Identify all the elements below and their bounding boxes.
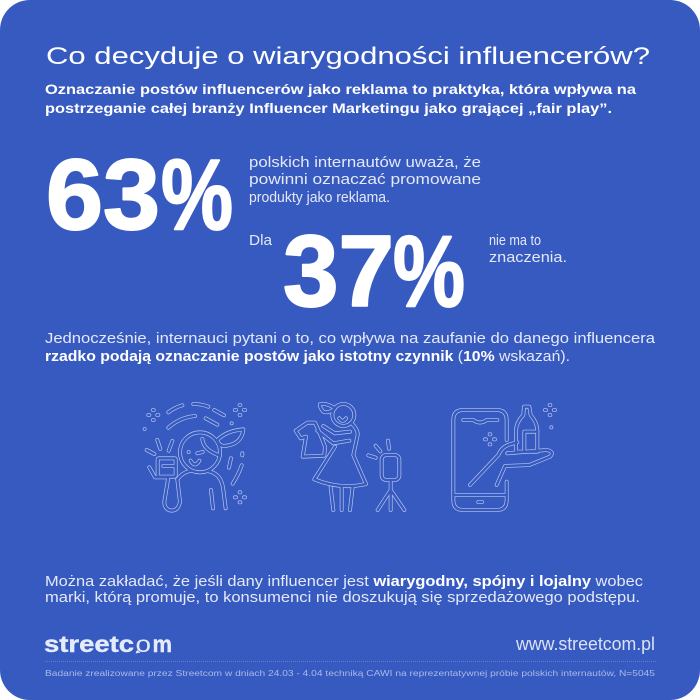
text: Dla: Dla (249, 233, 273, 249)
stat: 37%: % (393, 216, 465, 328)
text: trust factors: rzadko podają oznaczanie postów jako istotny czynnik (10% wskazań). (45, 348, 570, 365)
icon: influencer with phone (145, 404, 245, 511)
logo: streetcom: m (152, 631, 172, 657)
text: 37% description: nie ma to (489, 233, 541, 249)
text: trust factors: Jednocześnie, internauci pytani o to, co wpływa na zaufanie do danego influencera (45, 330, 656, 347)
icon: woman presenting shirt to camera (296, 404, 404, 510)
logo: streetcom: streetc (44, 631, 134, 657)
stat: 37%: 37 (283, 216, 394, 328)
text: trust factors (45, 330, 656, 365)
text: conclusion (45, 573, 644, 606)
stat: 63% (46, 139, 233, 251)
text: 63% description: polskich internautów uważa, że (249, 155, 481, 171)
text: 63% description: powinni oznaczać promowane (249, 172, 481, 188)
link: website: www.streetcom.pl (515, 634, 655, 654)
intro text (45, 81, 636, 116)
text: 37% description: znaczenia. (489, 250, 567, 266)
stat: 63%: 63 (46, 139, 160, 251)
footnote: Badanie zrealizowane przez Streetcom w dniach 24.03 - 4.04 techniką CAWI na reprezentatywnej próbie polskich internautów, N=5045 (45, 669, 656, 678)
icon: hand with bottle from phone (453, 405, 555, 510)
text: 63% description (249, 155, 481, 206)
text: 63% description: produkty jako reklama. (249, 190, 390, 206)
text: conclusion: Można zakładać, że jeśli dany influencer jest wiarygodny, spójny i lojalny wobec (45, 573, 644, 590)
logo: streetcom (44, 631, 172, 657)
text: conclusion: marki, którą promuje, to konsumenci nie doszukują się sprzedażowego podstępu. (45, 589, 640, 606)
stat: 37% (283, 216, 465, 328)
intro text: Oznaczanie postów influencerów jako reklama to praktyka, która wpływa na (45, 81, 636, 97)
logo: streetcom: o (136, 631, 151, 657)
stat: 63%: % (161, 139, 233, 251)
text: 37% description (489, 233, 567, 266)
intro text: postrzeganie całej branży Influencer Marketingu jako grającej „fair play”. (45, 100, 612, 116)
title: Co decyduje o wiarygodności influencerów? (46, 43, 650, 70)
